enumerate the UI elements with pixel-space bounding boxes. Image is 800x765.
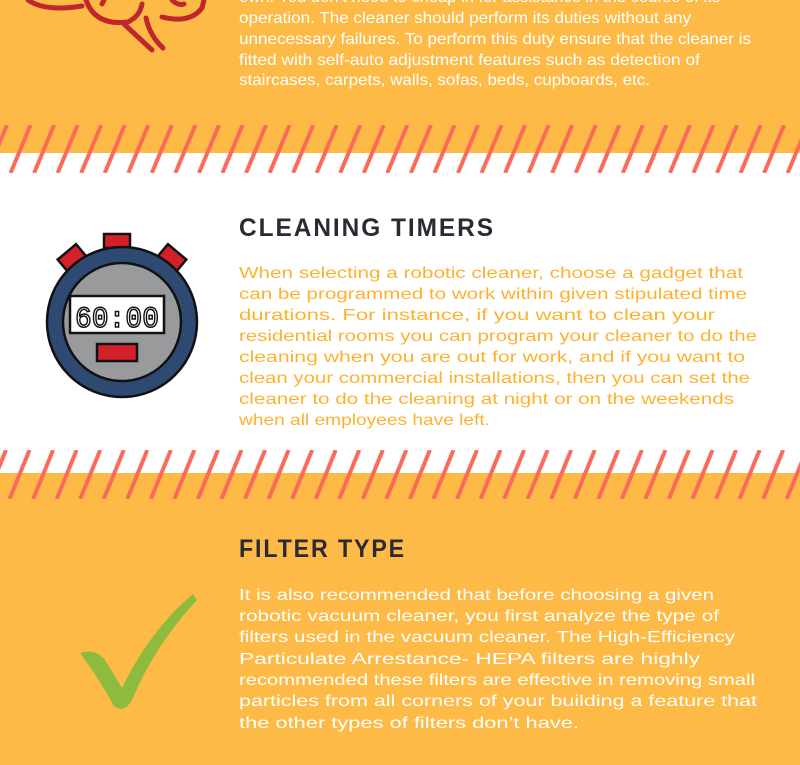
text: filter type body: the other types of filters don’t have. [239,715,579,732]
heading: filter type: FILTER TYPE [239,535,406,563]
icon: brain [28,0,204,50]
text: top section body: unnecessary failures. To perform this duty ensure that the cleaner is [239,31,751,48]
text: top section body: staircases, carpets, walls, sofas, beds, cupboards, etc. [239,72,650,89]
heading: cleaning timers: CLEANING TIMERS [239,214,495,242]
text: cleaning timers body [238,265,757,429]
text: cleaning timers body: When selecting a robotic cleaner, choose a gadget that [239,265,744,282]
text: cleaning timers body: durations. For instance, if you want to clean your [239,307,716,324]
divider stripes bottom [0,450,800,499]
text: cleaning timers body: cleaner to do the cleaning at night or on the weekends [239,391,734,408]
text: cleaning timers body: residential rooms you can program your cleaner to do the [239,328,757,345]
text: top section body: fitted with self-auto adjustment features such as detection of [239,52,701,69]
text: filter type body: particles from all corners of your building a feature that [239,693,758,710]
divider stripes top [0,125,800,173]
text: filter type body: recommended these filters are effective in removing small [239,672,755,689]
stopwatch display: 60:00 [75,303,159,337]
icon: checkmark [80,594,197,709]
text: filter type body: robotic vacuum cleaner, you first analyze the type of [239,608,720,625]
text: filter type body: filters used in the vacuum cleaner. The High-Efficiency [239,629,735,646]
text: top section body: operation. The cleaner should perform its duties without any [239,10,691,27]
text: filter type body: It is also recommended that before choosing a given [239,587,714,604]
text: cleaning timers body: clean your commercial installations, then you can set the [239,370,750,387]
text: top section body [239,0,751,89]
icon: stopwatch [47,234,197,397]
text: filter type body: Particulate Arrestance- HEPA filters are highly [239,651,700,668]
text: cleaning timers body: cleaning when you are out for work, and if you want to [239,349,745,366]
text: filter type body [239,587,758,732]
text: cleaning timers body: can be programmed to work within given stipulated time [239,286,747,303]
text: cleaning timers body: when all employees have left. [238,412,490,429]
